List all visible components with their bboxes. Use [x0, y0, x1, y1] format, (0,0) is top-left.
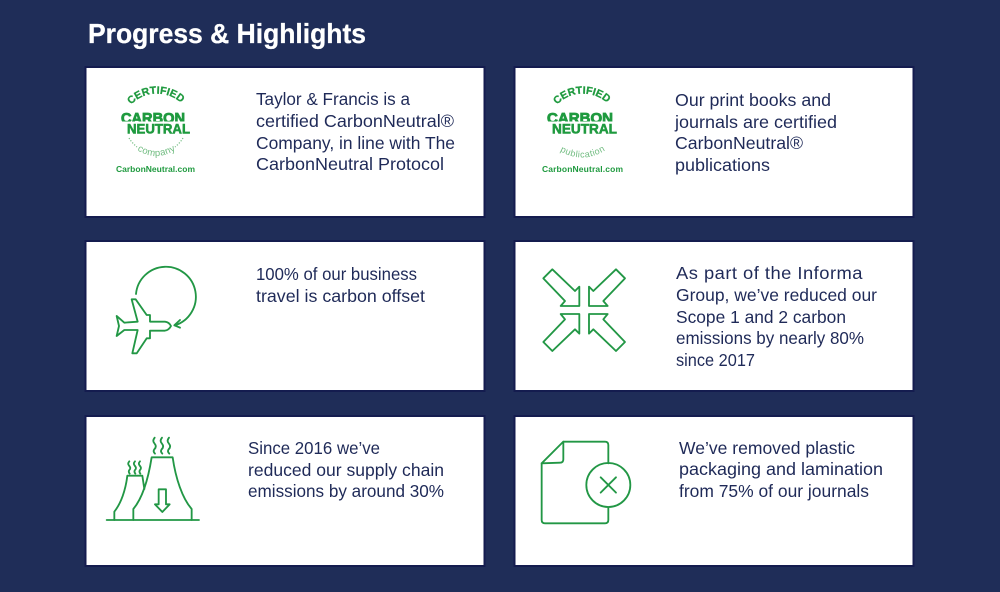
panel: plastic packaging	[514, 416, 914, 566]
text block: We’ve removed plastic	[679, 438, 855, 458]
text block: emissions by nearly 80%	[676, 328, 864, 348]
text block: Our print books and	[675, 90, 831, 110]
text block: As part of the Informa	[676, 263, 863, 283]
icon: CarbonNeutral publication logo: CARBON	[547, 111, 613, 127]
icon: four arrows pointing inward	[543, 269, 625, 351]
icon: CarbonNeutral company logo	[116, 86, 195, 174]
text block	[248, 438, 444, 501]
text block: publications	[675, 155, 770, 175]
text block	[679, 438, 883, 501]
icon: CarbonNeutral publication logo: publication	[560, 147, 605, 158]
panel: business travel	[86, 241, 484, 391]
text block	[256, 264, 425, 306]
text block: travel is carbon offset	[256, 286, 425, 306]
icon: document with cross	[542, 442, 630, 523]
text block: packaging and lamination	[679, 459, 883, 479]
text block: 100% of our business	[256, 264, 417, 284]
text block: certified CarbonNeutral®	[256, 111, 454, 131]
panel: CarbonNeutral company	[84, 66, 486, 218]
text block: journals are certified	[674, 112, 837, 132]
icon: CarbonNeutral company logo: company	[138, 146, 174, 158]
icon: CarbonNeutral publication logo: CERTIFIED	[554, 86, 610, 104]
text block: CarbonNeutral Protocol	[256, 154, 444, 174]
text block	[676, 263, 877, 370]
text block: Company, in line with The	[256, 133, 455, 153]
panel: Scope 1 and 2 emissions	[514, 241, 914, 391]
icon: CarbonNeutral company logo: CarbonNeutral.com	[116, 164, 195, 174]
text block: Taylor & Francis is a	[256, 89, 410, 109]
title: Progress & Highlights	[88, 18, 366, 49]
icon: CarbonNeutral company logo: CARBON	[121, 111, 185, 127]
text block: CarbonNeutral®	[675, 133, 803, 153]
icon: CarbonNeutral company logo: NEUTRAL	[127, 120, 190, 136]
icon: CarbonNeutral publication logo: CarbonNeutral.com	[542, 164, 623, 174]
panel: CarbonNeutral publications	[514, 66, 914, 218]
text block: Group, we’ve reduced our	[676, 285, 877, 305]
panel: supply chain emissions	[86, 416, 484, 566]
text block: from 75% of our journals	[679, 481, 869, 501]
text block: since 2017	[676, 350, 755, 370]
icon: CarbonNeutral publication logo: NEUTRAL	[552, 120, 617, 136]
icon: cooling towers with down arrow	[107, 438, 199, 520]
text block	[256, 89, 455, 174]
text block: Since 2016 we’ve	[248, 438, 380, 458]
text block	[674, 90, 837, 175]
icon: CarbonNeutral company logo: CERTIFIED	[128, 86, 184, 104]
icon: plane with circular arrow	[117, 267, 196, 353]
text block: emissions by around 30%	[248, 481, 444, 501]
icon: CarbonNeutral publication logo	[542, 86, 623, 174]
text block: Scope 1 and 2 carbon	[676, 307, 846, 327]
text block: reduced our supply chain	[248, 460, 444, 480]
